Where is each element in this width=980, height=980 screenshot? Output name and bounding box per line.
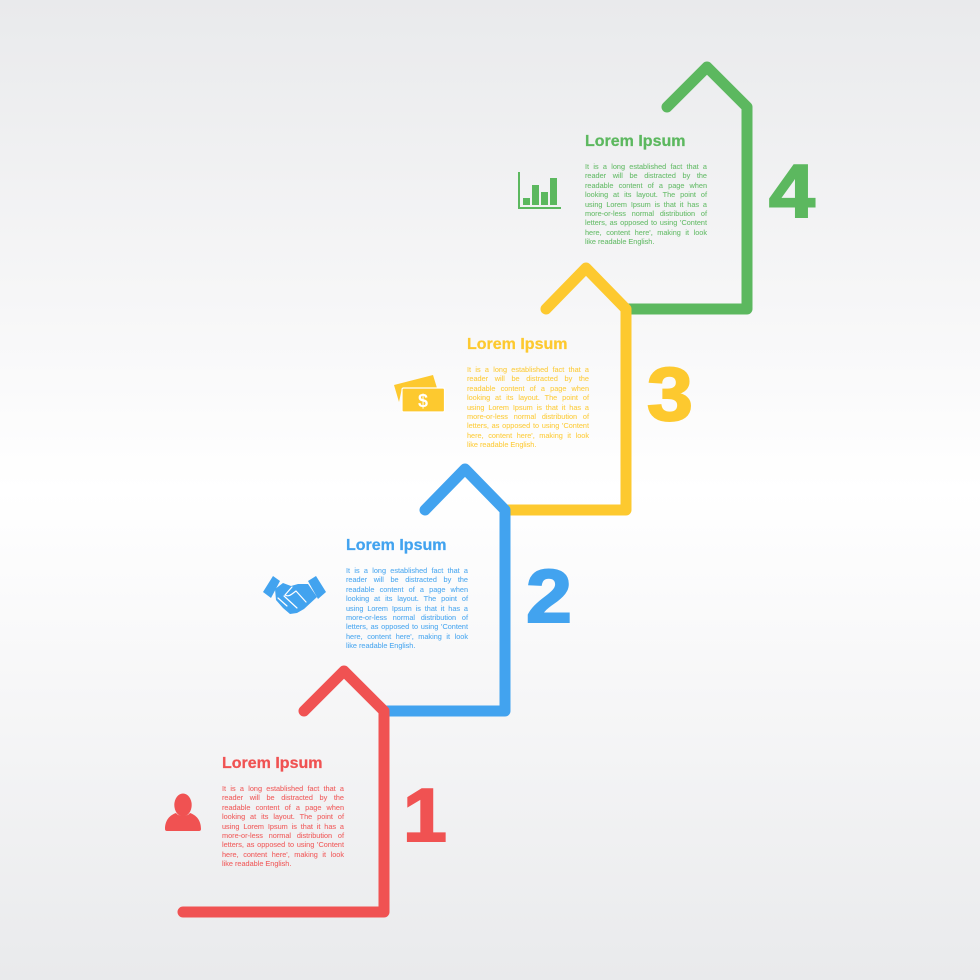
body text: step 4: reader will be distracted by the — [585, 171, 707, 180]
arrow: step 2 blue — [384, 469, 505, 711]
body text: step 3: looking at its layout. The point of — [467, 393, 589, 402]
text block: step 3 — [467, 336, 590, 449]
arrow: step 1 red — [183, 671, 384, 912]
icon: person — [165, 794, 201, 831]
body text: step 2: looking at its layout. The point of — [346, 594, 468, 603]
icon: money: $ — [418, 391, 428, 411]
body text: step 1: using Lorem Ipsum is that it has a — [222, 822, 344, 831]
body text: step 1: here, content here', making it look — [222, 850, 344, 859]
number 1: 1 — [403, 774, 447, 858]
body text: step 2: here, content here', making it look — [346, 632, 468, 641]
body text: step 4 — [585, 162, 708, 246]
body text: step 3: here, content here', making it look — [467, 431, 589, 440]
body text: step 2 — [346, 566, 468, 650]
body text: step 1: like readable English. — [222, 859, 291, 868]
arrow: step 3 yellow — [505, 268, 626, 510]
body text: step 1: letters, as opposed to using 'Content — [222, 840, 344, 849]
icon: money — [394, 375, 444, 412]
body text: step 2: reader will be distracted by the — [346, 575, 468, 584]
number 3: 3 — [647, 352, 693, 436]
body text: step 3: reader will be distracted by the — [467, 374, 589, 383]
body text: step 4: using Lorem Ipsum is that it has a — [585, 200, 707, 209]
icon: bar chart — [518, 172, 561, 209]
number 4: 4 — [769, 149, 815, 233]
body text: step 1: more-or-less normal distribution of — [222, 831, 344, 840]
body text: step 3: like readable English. — [467, 440, 536, 449]
text block: step 2 — [346, 537, 468, 650]
body text: step 4: looking at its layout. The point of — [585, 190, 707, 199]
body text: step 2: It is a long established fact that a — [346, 566, 468, 575]
body text: step 4: letters, as opposed to using 'Content — [585, 218, 707, 227]
body text: step 3: letters, as opposed to using 'Content — [467, 421, 589, 430]
text block: step 1 — [222, 755, 344, 868]
body text: step 2: like readable English. — [346, 641, 415, 650]
body text: step 1: reader will be distracted by the — [222, 793, 344, 802]
body text: step 2: readable content of a page when — [346, 585, 468, 594]
body text: step 3: It is a long established fact that a — [467, 365, 589, 374]
body text: step 3 — [467, 365, 590, 449]
heading: step 2: Lorem Ipsum — [346, 537, 446, 554]
text block: step 4 — [585, 133, 708, 246]
body text: step 4: more-or-less normal distribution of — [585, 209, 707, 218]
body text: step 4: It is a long established fact that a — [585, 162, 707, 171]
body text: step 4: here, content here', making it look — [585, 228, 707, 237]
body text: step 3: using Lorem Ipsum is that it has a — [467, 403, 589, 412]
body text: step 1: It is a long established fact that a — [222, 784, 344, 793]
body text: step 4: readable content of a page when — [585, 181, 707, 190]
body text: step 4: like readable English. — [585, 237, 654, 246]
body text: step 3: more-or-less normal distribution of — [467, 412, 589, 421]
heading: step 1: Lorem Ipsum — [222, 755, 322, 772]
number 2: 2 — [526, 554, 572, 638]
body text: step 2: using Lorem Ipsum is that it has a — [346, 604, 468, 613]
body text: step 3: readable content of a page when — [467, 384, 589, 393]
heading: step 4: Lorem Ipsum — [585, 133, 685, 150]
icon: handshake — [263, 576, 326, 614]
arrow: step 4 green — [626, 67, 747, 309]
body text: step 1: readable content of a page when — [222, 803, 344, 812]
body text: step 2: letters, as opposed to using 'Content — [346, 622, 468, 631]
body text: step 1: looking at its layout. The point of — [222, 812, 344, 821]
body text: step 2: more-or-less normal distribution of — [346, 613, 468, 622]
heading: step 3: Lorem Ipsum — [467, 336, 567, 353]
body text: step 1 — [222, 784, 344, 868]
